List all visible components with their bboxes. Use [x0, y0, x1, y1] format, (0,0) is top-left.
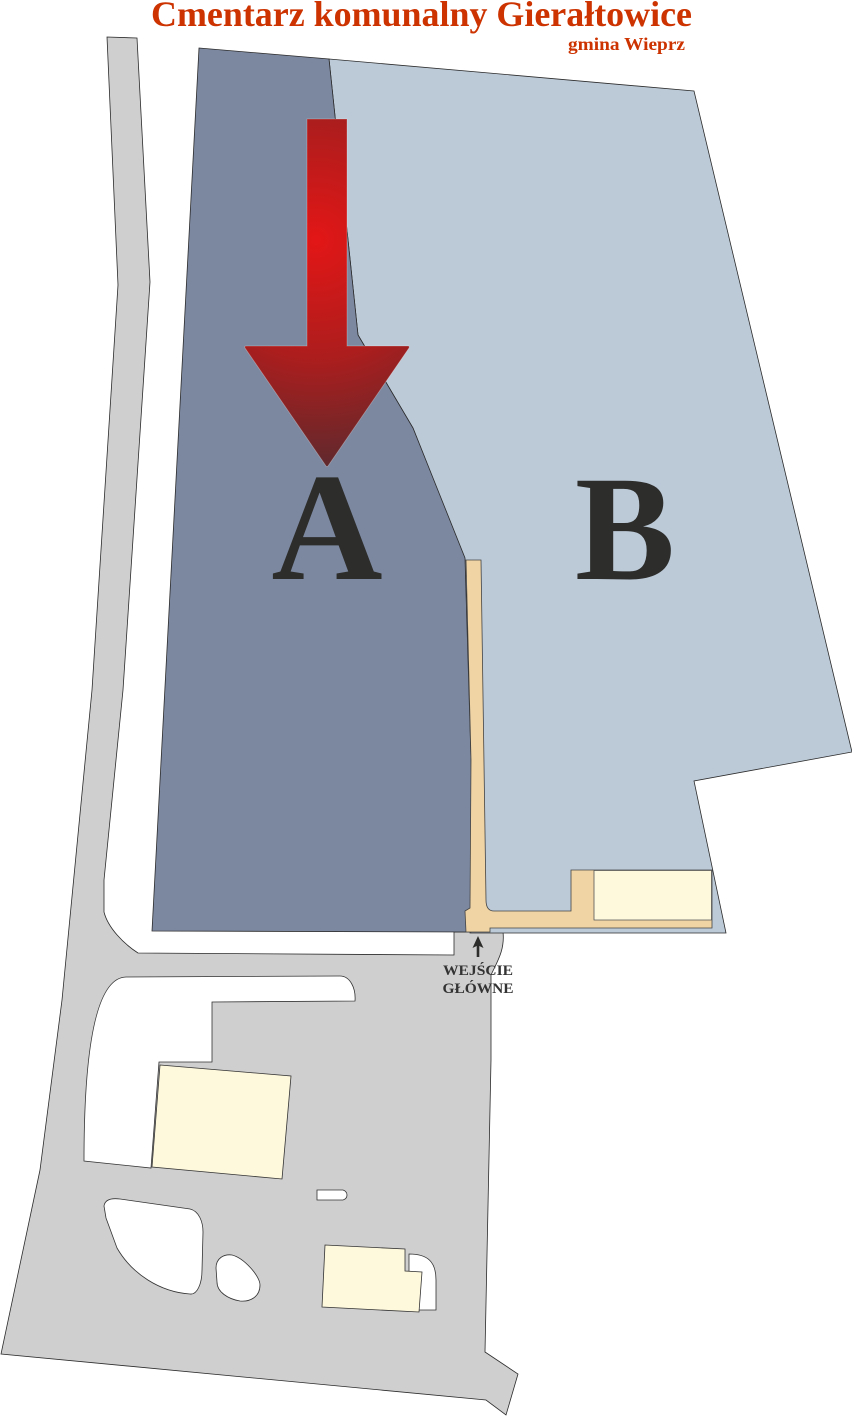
large green island [104, 1199, 203, 1294]
section label A: A [271, 443, 383, 613]
section label B: B [575, 446, 675, 612]
white yard behind small building [400, 1254, 436, 1310]
subtitle: gmina Wieprz [568, 34, 685, 54]
entrance path [465, 560, 712, 932]
small building [322, 1245, 422, 1312]
section A [152, 48, 471, 932]
large building [152, 1065, 291, 1179]
green area cutout near building [84, 976, 355, 1168]
entrance label [442, 962, 514, 997]
access road and parking area [1, 37, 518, 1415]
service building [594, 870, 712, 920]
small white marker [317, 1190, 347, 1200]
entrance label: WEJŚCIE [443, 962, 513, 979]
section B [329, 59, 852, 933]
red arrow pointing to section A [245, 119, 409, 466]
entrance arrow [472, 936, 484, 957]
small green island [216, 1255, 260, 1301]
entrance label: GŁÓWNE [442, 980, 514, 997]
